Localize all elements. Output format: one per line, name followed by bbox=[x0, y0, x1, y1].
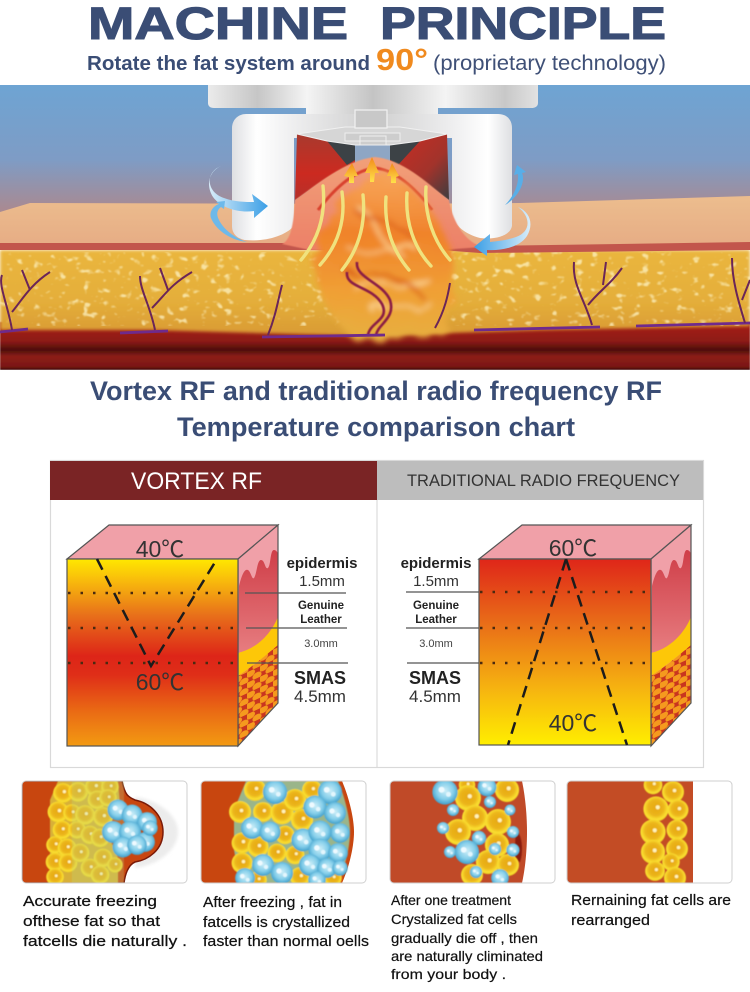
cube: traditional radio frequency bbox=[479, 525, 691, 746]
layer labels: traditional radio frequency: Leather bbox=[415, 614, 457, 626]
applicator left leg bbox=[232, 114, 294, 240]
layer labels: vortex RF: Leather bbox=[300, 614, 342, 626]
cube: traditional radio frequency: 40℃ bbox=[549, 710, 597, 736]
vein branches bbox=[1, 258, 750, 335]
header: traditional radio frequency: TRADITIONAL RADIO FREQUENCY bbox=[407, 471, 680, 490]
central vein bbox=[347, 262, 391, 335]
caption: step 4 bbox=[571, 893, 731, 929]
yellow RF lines bbox=[301, 186, 450, 270]
panel: fat cell step 2 bbox=[201, 779, 366, 889]
layer labels: traditional radio frequency: 3.0mm bbox=[419, 638, 453, 650]
cube: vortex RF bbox=[67, 525, 278, 746]
layer labels: traditional radio frequency: 4.5mm bbox=[409, 687, 461, 706]
heading bbox=[90, 376, 662, 442]
caption: step 3 bbox=[391, 892, 543, 982]
panel: traditional radio frequency bbox=[377, 461, 703, 746]
caption: step 3: Crystalized fat cells bbox=[391, 911, 517, 927]
title bbox=[88, 0, 666, 49]
illustration: machine principle skin cross-section bbox=[0, 85, 750, 370]
panel: temperature comparison chart bbox=[50, 460, 704, 768]
layer labels: vortex RF: 4.5mm bbox=[294, 687, 346, 706]
layer labels: vortex RF: Genuine bbox=[298, 600, 344, 612]
muscle layer bbox=[0, 322, 750, 370]
purple vessels bbox=[0, 323, 750, 337]
caption: step 2: faster than normal oells bbox=[203, 934, 369, 950]
heated dome bbox=[282, 157, 482, 250]
heading: Temperature comparison chart bbox=[177, 412, 575, 442]
caption: step 3: from your body . bbox=[391, 966, 506, 982]
panel: fat cell step 3 bbox=[390, 777, 555, 887]
caption: step 2 bbox=[203, 895, 369, 950]
flame swirl bbox=[311, 172, 452, 338]
layer labels: traditional radio frequency: 1.5mm bbox=[413, 573, 459, 590]
caption: step 1 bbox=[23, 893, 187, 950]
caption: step 1: Accurate freezing bbox=[23, 893, 157, 910]
panel: vortex RF bbox=[50, 461, 377, 746]
layer labels: traditional radio frequency: epidermis bbox=[401, 555, 471, 572]
layer labels: vortex RF: 3.0mm bbox=[304, 638, 338, 650]
dome inner edge bbox=[318, 168, 432, 210]
subtitle: (proprietary technology) bbox=[433, 52, 666, 75]
blue rotation arrows bbox=[209, 165, 530, 256]
panel: fat cell step 4 bbox=[567, 776, 732, 889]
layer labels: traditional radio frequency: SMAS bbox=[409, 668, 461, 688]
caption: step 2: After freezing , fat in bbox=[203, 895, 342, 911]
caption: step 3: are naturally climinated bbox=[391, 948, 543, 964]
subtitle bbox=[87, 42, 666, 77]
caption: step 1: ofthese fat so that bbox=[23, 913, 161, 930]
subtitle: 90° bbox=[376, 42, 428, 77]
layer labels: vortex RF bbox=[245, 555, 357, 706]
layer labels: vortex RF: 1.5mm bbox=[299, 573, 345, 590]
heading: Vortex RF and traditional radio frequency RF bbox=[90, 376, 662, 406]
cube: vortex RF: 60℃ bbox=[136, 669, 184, 695]
applicator head bbox=[208, 85, 538, 116]
layer labels: vortex RF: SMAS bbox=[294, 668, 346, 688]
skin band bbox=[0, 242, 750, 253]
caption: step 4: rearranged bbox=[571, 913, 650, 929]
fat layer bbox=[0, 250, 750, 336]
caption: step 3: gradually die off , then bbox=[391, 930, 538, 946]
applicator right leg bbox=[452, 114, 512, 238]
header: vortex RF bbox=[50, 461, 377, 500]
fat texture bbox=[0, 252, 750, 326]
sky background bbox=[0, 85, 750, 212]
header: vortex RF: VORTEX RF bbox=[131, 468, 262, 495]
caption: step 4: Rernaining fat cells are bbox=[571, 893, 731, 909]
cube: vortex RF: 40℃ bbox=[136, 536, 184, 562]
layer labels: vortex RF: epidermis bbox=[287, 555, 357, 572]
subtitle: Rotate the fat system around bbox=[87, 53, 370, 75]
skin surface bbox=[0, 196, 750, 250]
cube: traditional radio frequency: 60℃ bbox=[549, 535, 597, 561]
caption: step 3: After one treatment bbox=[391, 892, 511, 908]
header: traditional radio frequency bbox=[377, 461, 703, 500]
layer labels: traditional radio frequency bbox=[401, 555, 479, 706]
caption: step 1: fatcells die naturally . bbox=[23, 933, 187, 950]
orange heat arrows bbox=[344, 157, 399, 183]
layer labels: traditional radio frequency: Genuine bbox=[413, 600, 459, 612]
panel: fat cell step 1 bbox=[22, 777, 187, 886]
caption: step 2: fatcells is crystallized bbox=[203, 915, 350, 931]
